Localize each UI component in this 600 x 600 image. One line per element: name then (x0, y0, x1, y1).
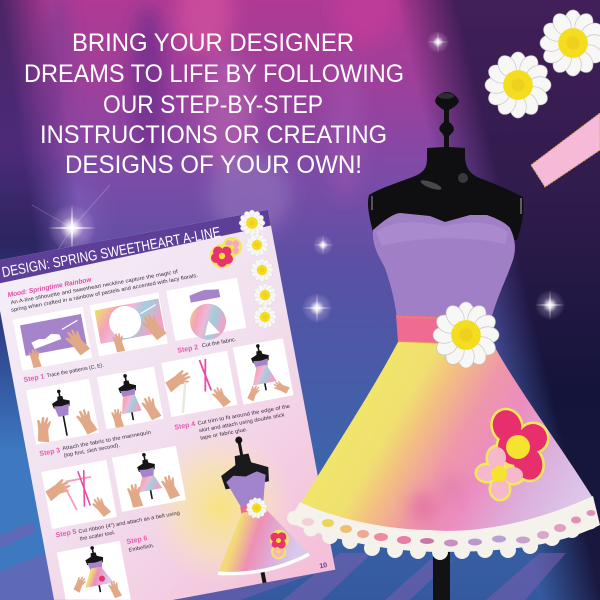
step 3: (top first, skirt second). (63, 443, 120, 459)
photo: embellish (57, 541, 131, 600)
page sheet (0, 210, 335, 600)
step 4 (174, 403, 293, 446)
photo: attach fabric front (26, 379, 99, 445)
intro text: spring when crafted in a rainbow of pastels and accented with lacy florals. (11, 273, 198, 314)
mannequin bust (368, 92, 524, 240)
page flower patches (210, 237, 242, 268)
mini finished dress (194, 428, 313, 591)
step 4: skirt and attach using double stick (198, 412, 285, 434)
step 2: Step 2 (177, 344, 199, 355)
title (24, 30, 404, 179)
page daisies (239, 210, 276, 328)
title: INSTRUCTIONS OR CREATING (40, 122, 387, 149)
step 3: Attach the fabric to the mannequin (62, 430, 152, 452)
step 6: Embellish. (128, 543, 155, 554)
step 2 (177, 337, 237, 355)
photo: trace pattern rainbow (89, 292, 169, 356)
mood heading: Mood: Springtime Rainbow (7, 276, 93, 299)
photo: attach belt (112, 446, 186, 512)
step 1: Step 1 (23, 373, 45, 384)
header title: DESIGN: SPRING SWEETHEART A-LINE (1, 225, 222, 281)
step 6 (126, 534, 155, 554)
instruction page (0, 210, 335, 600)
step 4: tape or fabric glue. (200, 427, 248, 442)
photo: attach fabric side (97, 366, 164, 430)
mini daisy (244, 496, 269, 520)
belt (396, 315, 493, 345)
step 1 (23, 362, 104, 384)
step 4: Cut trim to fit around the edge of the (197, 404, 291, 427)
belt daisy (433, 302, 499, 368)
sparkles (32, 31, 565, 323)
ribbon (531, 113, 600, 187)
loose daisy left (485, 52, 551, 118)
loose daisy right (540, 10, 600, 76)
step 5: Cut ribbon (4″) and attach as a belt using (78, 510, 180, 535)
lace trim (287, 496, 600, 560)
photo: trim on skirt (233, 338, 294, 405)
title: BRING YOUR DESIGNER (72, 30, 354, 57)
step 1: Trace the patterns (C, E). (46, 363, 104, 379)
step 4: Step 4 (174, 421, 196, 432)
step 6: Step 6 (126, 535, 148, 546)
photo: cut fabric (166, 278, 247, 346)
step 3: Step 3 (39, 447, 61, 458)
title: DESIGNS OF YOUR OWN! (65, 152, 362, 179)
mini dress glow (136, 418, 306, 597)
photo: trace pattern purple (13, 307, 92, 371)
bodice (373, 213, 515, 318)
photo: cut trim (161, 351, 237, 418)
step 5: Step 5 (55, 529, 77, 539)
step 5 (55, 509, 182, 547)
page number: 10 (319, 562, 328, 570)
step 3 (39, 430, 153, 463)
main dress (287, 92, 600, 560)
mannequin stand pole (433, 545, 450, 600)
header band (0, 210, 272, 284)
mini flower patch (267, 528, 292, 560)
title: DREAMS TO LIFE BY FOLLOWING (24, 61, 404, 88)
flower patch (477, 406, 547, 499)
skirt (300, 342, 593, 534)
photo: cut ribbon (41, 460, 117, 529)
step 2: Cut the fabric. (201, 337, 237, 349)
step 5: the scaler tool. (79, 530, 116, 542)
title: OUR STEP-BY-STEP (103, 92, 323, 119)
intro text: An A-line silhouette and sweetheart neckline capture the magic of (10, 269, 179, 306)
